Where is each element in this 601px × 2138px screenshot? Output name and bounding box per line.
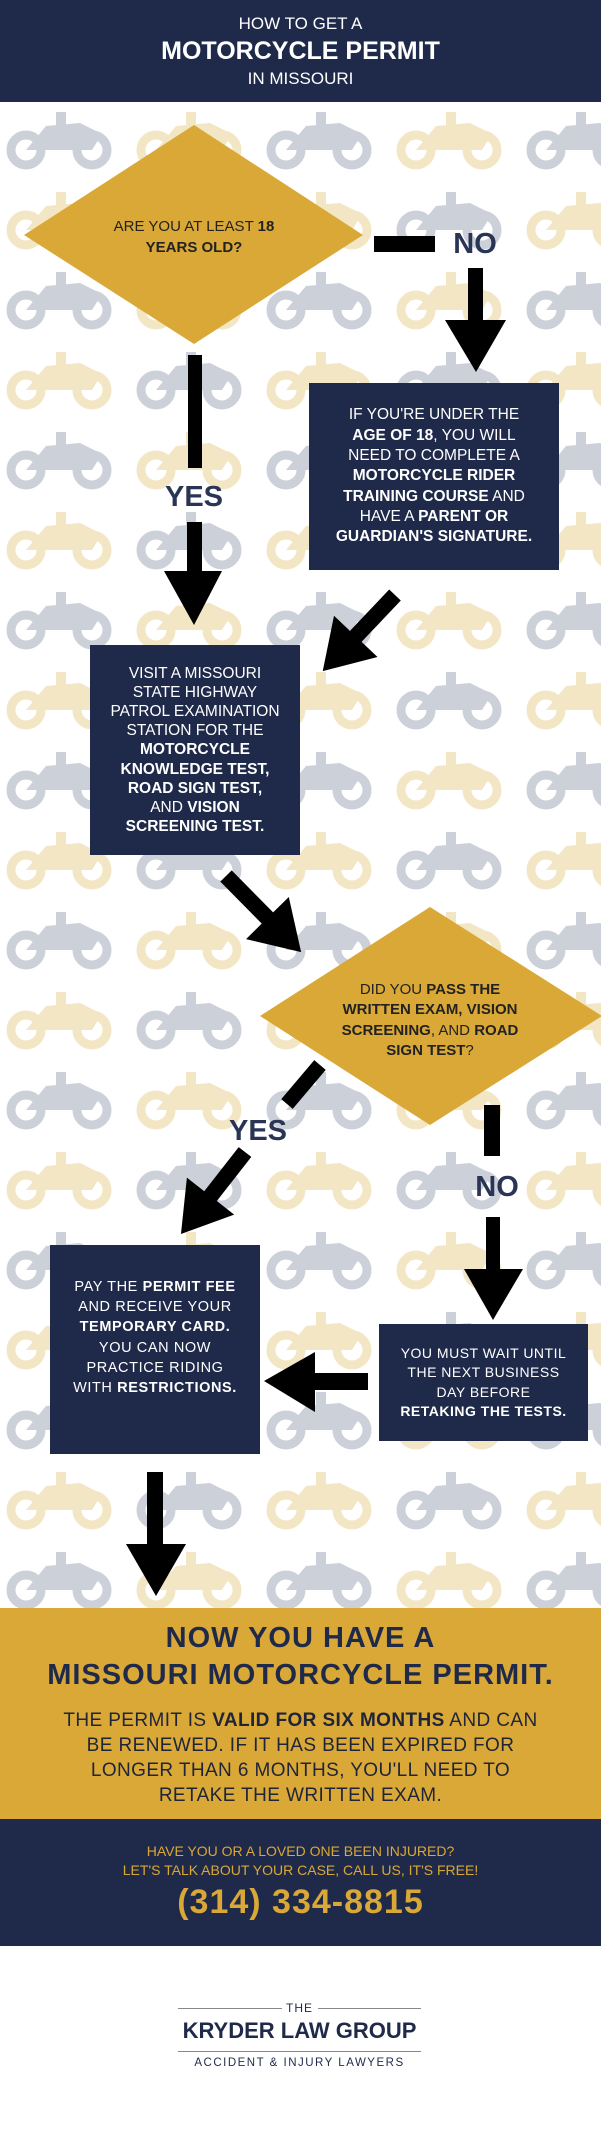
box: wait: DAY BEFORE bbox=[437, 1384, 530, 1400]
box: visit station bbox=[90, 645, 300, 855]
box: visit station: KNOWLEDGE TEST, bbox=[120, 761, 269, 778]
box: visit station: AND VISION bbox=[150, 799, 240, 816]
box: visit station: STATION FOR THE bbox=[127, 722, 263, 739]
arrow: no branch 2: NO bbox=[475, 1171, 519, 1203]
box: under 18: TRAINING COURSE AND bbox=[343, 488, 525, 505]
arrow: pay to permit bbox=[126, 1472, 186, 1596]
box: under 18 bbox=[309, 383, 559, 570]
arrow: no branch 1 bbox=[374, 228, 506, 372]
header bbox=[0, 0, 601, 102]
box: pay permit fee: AND RECEIVE YOUR bbox=[78, 1299, 232, 1315]
flow arrows and diamonds bbox=[24, 125, 601, 1596]
header: MOTORCYCLE PERMIT bbox=[161, 37, 440, 65]
box: wait: YOU MUST WAIT UNTIL bbox=[401, 1344, 566, 1360]
header: HOW TO GET A bbox=[239, 14, 362, 33]
box: pay permit fee: WITH RESTRICTIONS. bbox=[73, 1380, 237, 1396]
box: pay permit fee: TEMPORARY CARD. bbox=[80, 1319, 230, 1335]
diamond 1: YEARS OLD? bbox=[146, 239, 242, 256]
arrow: yes branch 1 bbox=[164, 355, 223, 625]
background motorcycle pattern bbox=[6, 112, 601, 1608]
result band: LONGER THAN 6 MONTHS, YOU'LL NEED TO bbox=[91, 1760, 510, 1781]
contact band: LET'S TALK ABOUT YOUR CASE, CALL US, IT'S FREE! bbox=[123, 1862, 478, 1878]
box: visit station: PATROL EXAMINATION bbox=[110, 703, 280, 720]
box: visit station: SCREENING TEST. bbox=[126, 818, 264, 835]
box: visit station: ROAD SIGN TEST, bbox=[128, 780, 262, 797]
box: under 18: GUARDIAN'S SIGNATURE. bbox=[336, 528, 532, 545]
box: visit station: STATE HIGHWAY bbox=[133, 684, 257, 701]
arrow: wait to pay bbox=[264, 1352, 368, 1412]
contact band: HAVE YOU OR A LOVED ONE BEEN INJURED? bbox=[147, 1843, 454, 1859]
box: visit station: MOTORCYCLE bbox=[140, 741, 250, 758]
logo: ACCIDENT & INJURY LAWYERS bbox=[194, 2057, 405, 2069]
result band: MISSOURI MOTORCYCLE PERMIT. bbox=[47, 1659, 554, 1691]
diamond 2: SCREENING, AND ROAD bbox=[342, 1022, 519, 1039]
diamond 2: WRITTEN EXAM, VISION bbox=[342, 1001, 518, 1018]
diamond 2: SIGN TEST? bbox=[386, 1042, 474, 1059]
arrow: box2 to diamond2 bbox=[205, 855, 322, 973]
box: visit station: VISIT A MISSOURI bbox=[129, 665, 261, 682]
arrow: box1 to box2 bbox=[301, 574, 417, 692]
box: under 18: IF YOU'RE UNDER THE bbox=[349, 406, 519, 423]
box: under 18: MOTORCYCLE RIDER bbox=[353, 467, 515, 484]
diamond 2: DID YOU PASS THE bbox=[360, 981, 500, 998]
box: wait bbox=[379, 1324, 588, 1441]
box: pay permit fee: PRACTICE RIDING bbox=[86, 1360, 224, 1376]
result band: THE PERMIT IS VALID FOR SIX MONTHS AND CAN bbox=[63, 1710, 538, 1731]
box: pay permit fee bbox=[50, 1245, 260, 1454]
box: wait: RETAKING THE TESTS. bbox=[400, 1403, 567, 1419]
result band bbox=[0, 1608, 601, 1819]
diamond 1: ARE YOU AT LEAST 18 bbox=[114, 218, 274, 235]
diamond 1 bbox=[24, 125, 363, 344]
logo bbox=[178, 2001, 421, 2069]
arrow: yes branch 2: YES bbox=[229, 1115, 287, 1147]
logo: THE bbox=[286, 2001, 313, 2015]
result band: NOW YOU HAVE A bbox=[166, 1622, 435, 1654]
arrow: yes branch 1: YES bbox=[165, 481, 223, 513]
result band: RETAKE THE WRITTEN EXAM. bbox=[159, 1785, 442, 1806]
box: under 18: NEED TO COMPLETE A bbox=[348, 447, 520, 464]
arrow: no branch 1: NO bbox=[453, 228, 497, 260]
diamond 2 bbox=[260, 907, 601, 1125]
box: wait: THE NEXT BUSINESS bbox=[407, 1364, 560, 1380]
box: under 18: HAVE A PARENT OR bbox=[360, 508, 508, 525]
logo: KRYDER LAW GROUP bbox=[183, 2018, 416, 2043]
box: pay permit fee: PAY THE PERMIT FEE bbox=[74, 1279, 236, 1295]
box: pay permit fee: YOU CAN NOW bbox=[99, 1340, 211, 1356]
arrow: yes branch 2 bbox=[157, 1065, 320, 1252]
box: under 18: AGE OF 18, YOU WILL bbox=[352, 427, 516, 444]
contact band: (314) 334-8815 bbox=[177, 1883, 424, 1921]
result band: BE RENEWED. IF IT HAS BEEN EXPIRED FOR bbox=[87, 1735, 514, 1756]
arrow: no branch 2 bbox=[464, 1105, 523, 1320]
header: IN MISSOURI bbox=[248, 69, 353, 88]
contact band bbox=[0, 1819, 601, 1946]
